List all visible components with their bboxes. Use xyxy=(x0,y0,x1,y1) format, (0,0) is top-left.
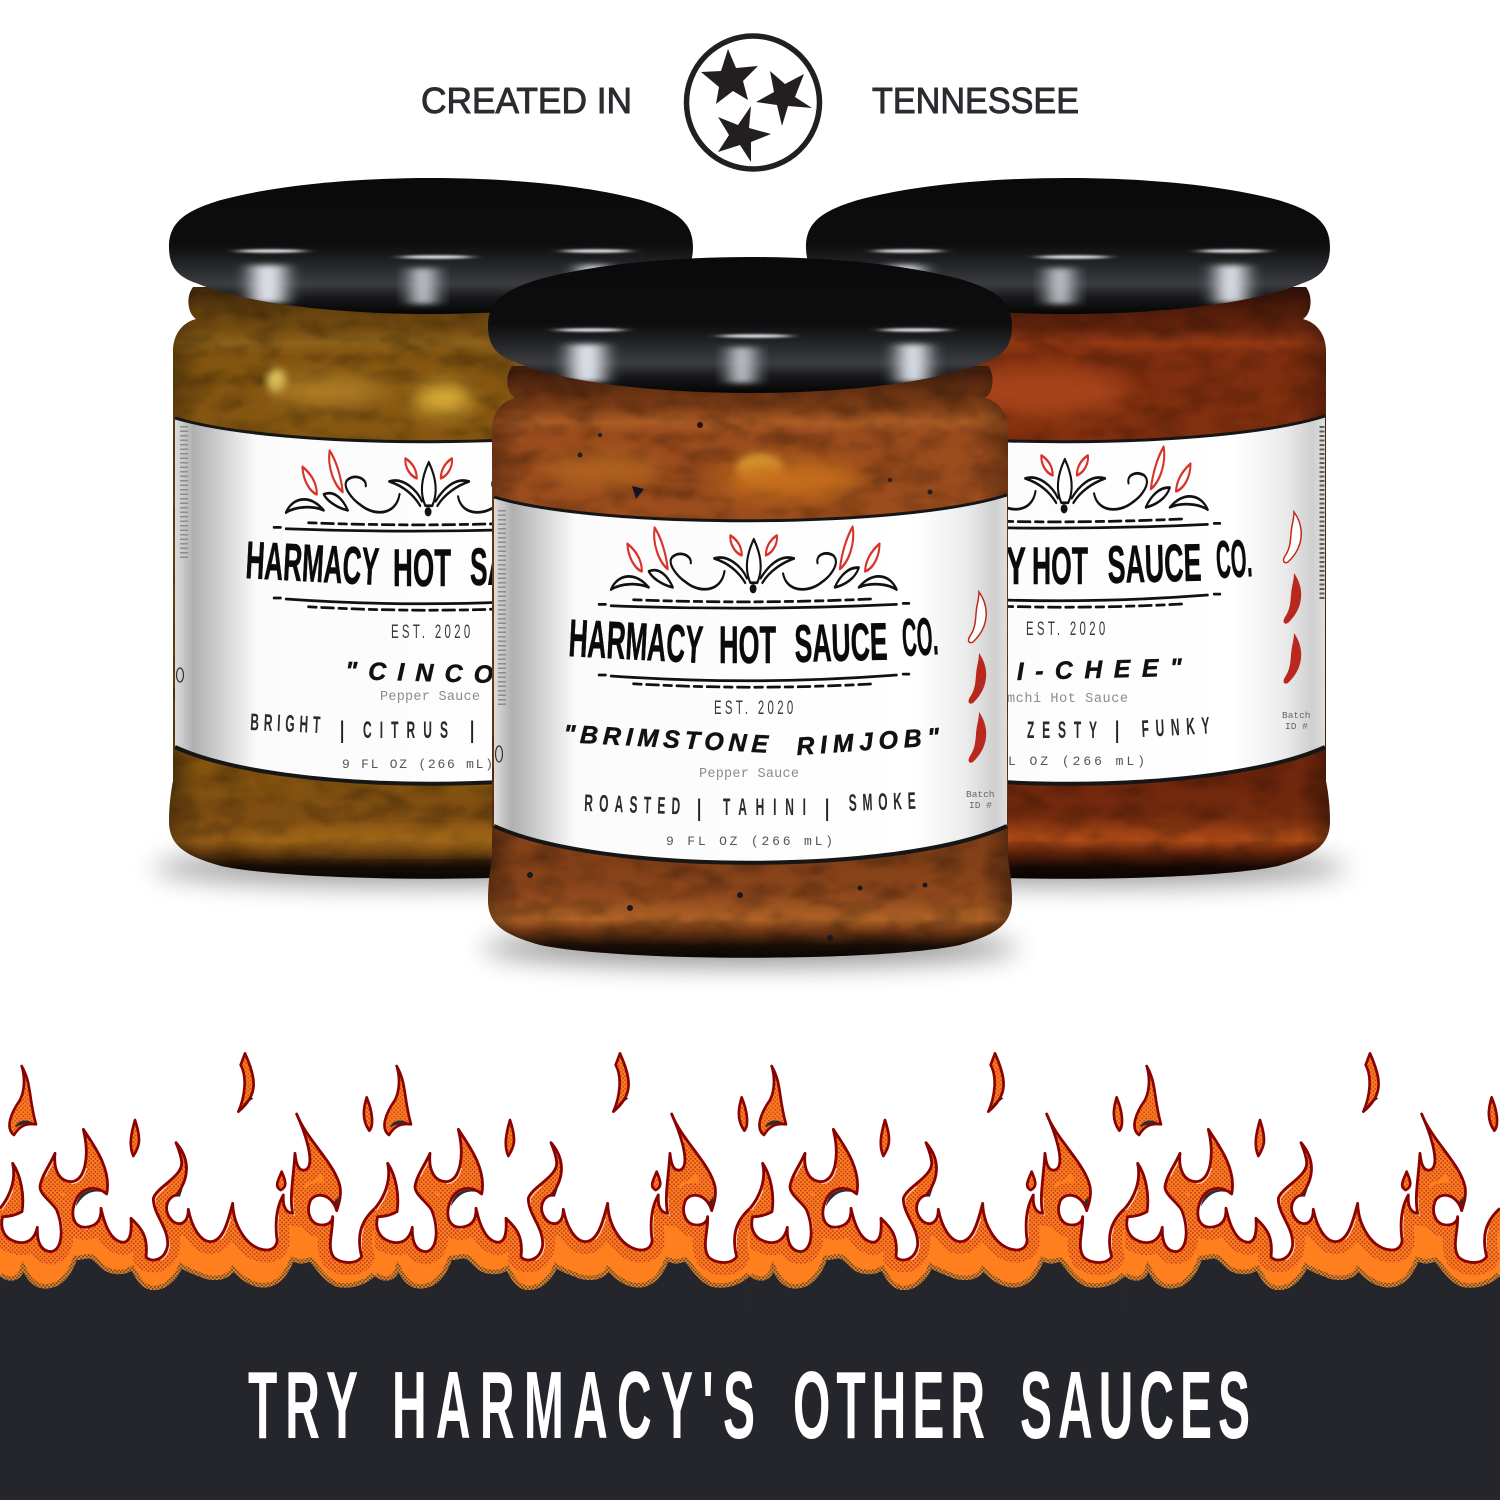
brand name: HARMACY xyxy=(244,531,380,597)
jar shadow xyxy=(823,850,1347,886)
flavor notes: SMOKE xyxy=(848,788,916,817)
flavor notes: ZESTY xyxy=(1027,718,1097,744)
footer heading: TRY xyxy=(248,1352,358,1460)
footer heading: OTHER xyxy=(793,1352,985,1460)
flavor notes xyxy=(1027,713,1210,744)
label ornament xyxy=(274,450,584,610)
icon: tennessee mark xyxy=(496,746,502,762)
flavor name: RIMJOB" xyxy=(795,723,941,761)
flavor name: I-CHEE" xyxy=(1016,654,1183,686)
icon: heat chilis xyxy=(1284,512,1301,684)
est date: EST. 2020 xyxy=(391,622,470,643)
sauce type: Pepper Sauce xyxy=(699,767,799,782)
brand name xyxy=(1006,529,1254,596)
batch id xyxy=(1282,710,1311,732)
flavor name xyxy=(563,720,941,761)
jar shadow xyxy=(153,850,677,886)
brand name: SAUCE xyxy=(794,613,888,674)
brand name xyxy=(567,607,940,675)
jar glass and sauce xyxy=(806,178,1330,881)
flavor notes: CITRUS xyxy=(363,718,448,744)
jar: left cinco xyxy=(153,178,693,886)
est date: EST. 2020 xyxy=(1026,619,1105,640)
flavor notes: | xyxy=(824,795,830,822)
est date: EST. 2020 xyxy=(714,698,793,719)
brand name: HOT xyxy=(719,616,776,675)
jar glass and sauce xyxy=(488,257,1012,960)
brand name: HOT xyxy=(1032,537,1088,596)
volume: L OZ (266 mL) xyxy=(1008,754,1145,769)
footer heading xyxy=(248,1352,1250,1460)
flavor notes: | xyxy=(469,717,475,744)
label ornament xyxy=(599,527,909,687)
sauce type: Pepper Sauce xyxy=(380,690,480,705)
batch id: ID # xyxy=(969,800,992,811)
icon: heat chilis xyxy=(969,592,986,763)
flavor notes: BRIGHT xyxy=(250,710,321,739)
jar: right kimchi xyxy=(806,178,1347,886)
brand name: HOT xyxy=(393,539,451,598)
brand name: HARMACY xyxy=(567,609,704,675)
jar shadow xyxy=(482,930,1018,966)
icon: tennessee tri-star xyxy=(686,36,820,169)
icon: tennessee mark xyxy=(176,668,184,682)
batch id: ID # xyxy=(1285,721,1308,732)
heading: created in: CREATED IN xyxy=(421,80,632,121)
brand name: Y xyxy=(1006,537,1026,596)
heading: tennessee: TENNESSEE xyxy=(872,80,1079,121)
dark footer band xyxy=(0,1310,1500,1500)
flavor notes xyxy=(584,788,916,822)
batch id: Batch xyxy=(966,789,995,800)
footer heading: HARMACY'S xyxy=(392,1352,755,1460)
flavor notes: ROASTED xyxy=(584,791,681,821)
flavor notes: | xyxy=(339,717,345,744)
jar glass and sauce xyxy=(169,178,693,881)
footer heading: SAUCES xyxy=(1020,1352,1250,1460)
flavor notes: | xyxy=(696,795,702,822)
jar: left cinco: SAUCE xyxy=(470,538,562,597)
flavor notes: TAHINI xyxy=(723,795,806,821)
volume: 9 FL OZ (266 mL) xyxy=(666,834,833,849)
flavor notes: | xyxy=(1114,717,1120,744)
flavor notes: FUNKY xyxy=(1141,713,1210,743)
sauce type: mchi Hot Sauce xyxy=(1007,692,1128,707)
volume: 9 FL OZ (266 mL) xyxy=(342,757,493,772)
flavor name: "BRIMSTONE xyxy=(563,720,770,759)
batch id: Batch xyxy=(1282,710,1311,721)
jar: centre brimstone xyxy=(482,257,1018,966)
batch id xyxy=(966,789,995,811)
label ornament xyxy=(910,447,1220,607)
jar: right kimchi: CO. xyxy=(1215,529,1254,590)
flavor name: "CINCO xyxy=(345,657,494,689)
jar: centre brimstone: CO. xyxy=(901,607,940,668)
brand name: SAUCE xyxy=(1107,534,1202,595)
flavor notes xyxy=(250,710,475,744)
flame border xyxy=(0,1053,1500,1313)
